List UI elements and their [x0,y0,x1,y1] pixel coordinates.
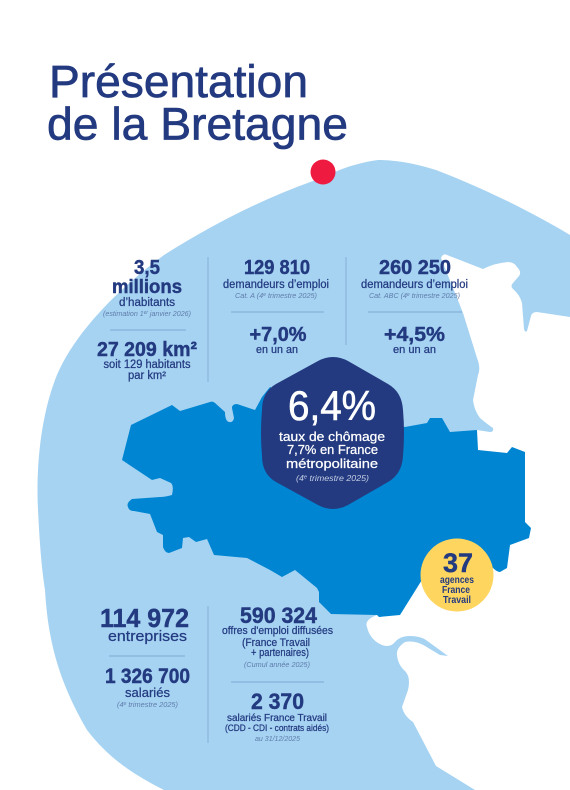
badge: agencies: Travail [443,595,471,606]
map: sea and neighbouring land [38,160,570,790]
badge: agencies [420,538,494,612]
stat: employees: (4 [117,700,124,709]
stat: job seekers category A: 129 810 [244,257,310,279]
stat: population [103,257,191,318]
stat: employees: e [124,701,127,707]
title [47,56,348,150]
stat: employees [105,665,190,709]
badge: agencies: France [442,585,470,596]
stat: staff: 2 370 [251,689,304,714]
stat: job seekers category A: Cat. A (4 [235,291,264,300]
stat: employees: salariés [125,685,171,700]
stat: job seekers category ABC: trimestre 2025) [410,291,460,300]
stat: population: janvier 2026) [148,309,191,318]
stat: population: d’habitants [119,297,175,309]
callout: unemployment rate: (4 [296,473,304,483]
stat: job seekers category A: trimestre 2025) [266,291,317,300]
badge: agencies: agences [440,575,474,586]
callout: unemployment rate: taux de chômage [279,429,385,444]
stat: job seekers category A: +7,0% [250,324,307,346]
title: de la Bretagne [47,98,348,150]
stat: staff: salariés France Travail [227,712,327,724]
stat: employees: trimestre 2025) [126,700,178,709]
stat: staff [225,689,329,743]
stat: area: soit 129 habitants [104,359,191,371]
stat: job seekers category A: en un an [256,344,298,356]
callout: unemployment rate: trimestre 2025) [307,473,369,483]
stat: staff: au 31/12/2025 [255,734,301,743]
stat: job offers: 590 324 [240,603,318,628]
callout: unemployment rate: 7,7% en France [287,442,378,457]
stat: job seekers category ABC: 260 250 [379,257,451,279]
stat: job offers: offres d'emploi diffusées [222,625,333,637]
callout: unemployment rate [261,357,404,509]
stat: population: 3,5 [134,257,160,279]
stat: job seekers category A: e [263,292,266,298]
stat: employees: 1 326 700 [105,665,190,688]
stat: job offers: + partenaires) [251,647,309,659]
stat: population: er [144,310,148,316]
stat: job seekers category ABC [361,257,468,356]
stat: staff: (CDD - CDI - contrats aidés) [225,723,329,734]
stat: job seekers category ABC: en un an [393,344,436,356]
callout: unemployment rate: 6,4% [288,382,376,429]
marker: red dot [310,160,336,184]
stat: job seekers category ABC: demandeurs d’emploi [361,279,468,291]
stat: area: 27 209 km² [97,339,197,361]
stat: job seekers category ABC: +4,5% [384,324,445,346]
stat: companies [100,603,189,645]
stat: companies: 114 972 [100,603,189,633]
stat: job offers [222,603,333,669]
badge: agencies: 37 [443,548,473,578]
stat: job seekers category A [223,257,329,356]
callout: unemployment rate: métropolitaine [286,456,378,471]
stat: area: par km² [128,370,166,382]
stat: job seekers category ABC: e [407,292,410,298]
callout: unemployment rate: e [304,474,307,480]
title: Présentation [49,56,308,107]
stat: job offers: (France Travail [242,637,310,649]
stat: job seekers category A: demandeurs d’emploi [223,279,329,291]
stat: companies: entreprises [108,628,187,645]
stat: job seekers category ABC: Cat. ABC (4 [369,291,409,300]
map: Bretagne region [122,387,531,617]
stat: population: (estimation 1 [103,309,146,318]
stat: job offers: (Cumul année 2025) [244,660,310,669]
stat: area [97,339,197,382]
stat: population: millions [112,276,182,298]
